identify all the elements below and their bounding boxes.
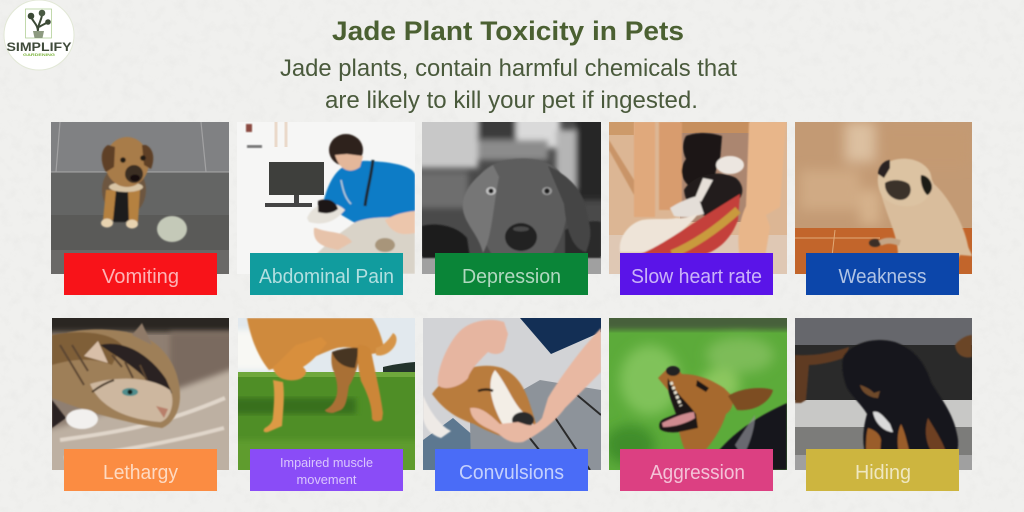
subtitle: Jade plants, contain harmful chemicals that (280, 55, 737, 82)
label: Aggression: Aggression (650, 462, 745, 484)
label: Impaired muscle movement (250, 449, 403, 491)
card: vomiting (51, 122, 229, 295)
label: Abdominal Pain (250, 253, 403, 295)
label: Lethargy: Lethargy (103, 462, 178, 484)
photo: sad black and white dog (422, 122, 601, 274)
photo: tabby cat on blanket (52, 318, 229, 470)
label: Impaired muscle movement: Impaired muscle (280, 456, 373, 470)
label: Aggression (620, 449, 773, 491)
label: Slow heart rate (620, 253, 773, 295)
label: Convulsions: Convulsions (459, 462, 564, 484)
logo: Simplify Gardening: GARDENING (23, 52, 55, 57)
label: Vomiting: Vomiting (102, 266, 179, 288)
label: Hiding (806, 449, 959, 491)
card: lethargy (40, 306, 250, 491)
card: weakness (795, 122, 972, 295)
photo: pug against wall (795, 122, 972, 274)
card: impaired muscle movement (226, 318, 426, 491)
card: depression (410, 110, 616, 295)
card: hiding (795, 318, 972, 491)
photo: dog resting on cushion under table (609, 122, 787, 274)
label: Weakness: Weakness (838, 266, 926, 288)
title: Jade Plant Toxicity in Pets (332, 16, 684, 46)
label: Lethargy (64, 449, 217, 491)
card: convulsions (423, 318, 601, 491)
photo: snarling dog on green background (609, 318, 787, 470)
card: abdominal pain (237, 122, 415, 295)
card: aggression (597, 306, 797, 491)
label: Depression (435, 253, 588, 295)
label: Slow heart rate: Slow heart rate (631, 266, 762, 288)
label: Impaired muscle movement: movement (296, 473, 357, 487)
subtitle (280, 55, 737, 114)
subtitle: are likely to kill your pet if ingested. (325, 87, 698, 114)
label: Hiding: Hiding (855, 462, 911, 484)
card: slow heart rate (609, 122, 787, 295)
photo: dark dog under furniture (795, 318, 972, 470)
label: Vomiting (64, 253, 217, 295)
logo: Simplify Gardening: SIMPLIFY (6, 42, 72, 54)
photo: hands holding dog's head (423, 318, 601, 470)
label: Convulsions (435, 449, 588, 491)
label: Depression: Depression (462, 266, 561, 288)
logo: Simplify Gardening (4, 0, 74, 70)
photo: vet examining dog (237, 122, 415, 274)
photo: puppy on tile floor (51, 122, 229, 274)
label: Abdominal Pain: Abdominal Pain (259, 266, 394, 288)
label: Weakness (806, 253, 959, 295)
photo: dog standing on grass (238, 318, 415, 470)
